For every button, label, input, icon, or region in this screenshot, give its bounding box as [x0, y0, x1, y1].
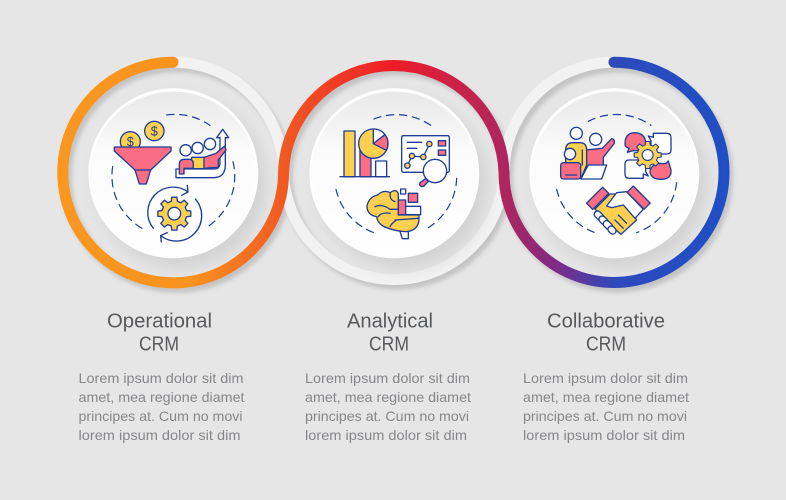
icon: operational CRM: $ — [127, 135, 134, 149]
text block: Analytical description: Lorem ipsum dolor sit dim — [305, 370, 470, 386]
panel: disc 1 — [88, 88, 266, 268]
text block: Collaborative description: principes at. Cum no movi — [523, 408, 687, 424]
text block: Analytical description: amet, mea regione diamet — [305, 389, 471, 405]
text block: Operational description: amet, mea regione diamet — [78, 389, 245, 405]
heading: Analytical CRM: CRM — [369, 334, 409, 356]
heading: Collaborative CRM: CRM — [586, 334, 626, 356]
heading: Operational CRM: Operational — [107, 310, 212, 332]
heading: Operational CRM — [107, 310, 212, 356]
icon: operational CRM: $ — [151, 124, 158, 138]
panel: disc 2 — [309, 88, 487, 268]
ribbon light track — [173, 62, 614, 279]
icon: analytical CRM — [336, 115, 457, 239]
text block: Operational description: Lorem ipsum dolor sit dim — [78, 370, 244, 386]
text block: Collaborative description: lorem ipsum dolor sit dim — [523, 427, 685, 443]
heading: Analytical CRM: Analytical — [347, 310, 433, 332]
text block: Operational description: lorem ipsum dolor sit dim — [78, 427, 241, 443]
icon: collaborative CRM — [557, 114, 677, 235]
text block: Analytical description: lorem ipsum dolor sit dim — [305, 427, 467, 443]
text block: Analytical description — [305, 370, 471, 443]
gradient ribbon — [63, 62, 724, 283]
icon: operational CRM — [112, 114, 235, 242]
heading: Collaborative CRM — [547, 310, 665, 356]
heading: Collaborative CRM: Collaborative — [547, 310, 665, 332]
text block: Collaborative description: amet, mea regione diamet — [523, 389, 689, 405]
text block: Collaborative description: Lorem ipsum dolor sit dim — [523, 370, 688, 386]
text block: Collaborative description — [523, 370, 689, 443]
text block: Operational description: principes at. Cum no movi — [78, 408, 242, 424]
heading: Analytical CRM — [347, 310, 433, 356]
ribbon track shadow — [66, 67, 728, 287]
text block: Operational description — [78, 370, 245, 443]
text block: Analytical description: principes at. Cum no movi — [305, 408, 469, 424]
panel: disc 3 — [529, 88, 707, 268]
heading: Operational CRM: CRM — [139, 334, 179, 356]
